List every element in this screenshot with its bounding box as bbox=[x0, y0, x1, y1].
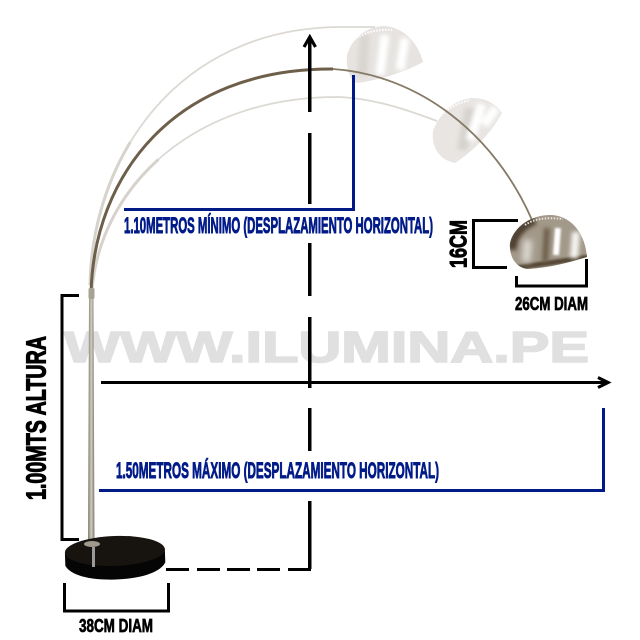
watermark: WWW.ILUMINA.PE bbox=[64, 323, 589, 372]
bracket: height bbox=[62, 296, 79, 540]
bracket: base diameter bbox=[64, 583, 168, 611]
lamp: main arc outer section bbox=[333, 69, 532, 220]
lamp: pole collar bbox=[88, 288, 94, 299]
bracket: shade diameter bbox=[516, 259, 586, 286]
arrow: vertical dashed axis bbox=[304, 37, 316, 569]
arrow: horizontal axis bbox=[101, 378, 608, 388]
icon: upper ghost shade bbox=[346, 26, 423, 83]
lamp: base collar bbox=[84, 541, 100, 547]
lamp: thick ghost sections bbox=[90, 27, 340, 290]
blue bracket: maximum reach bbox=[99, 408, 604, 490]
lamp: pole bbox=[88, 298, 94, 545]
lamp: lower ghost arc bbox=[92, 97, 437, 290]
bracket: shade height bbox=[474, 220, 518, 268]
label: shade diameter: 26CM DIAM bbox=[515, 294, 588, 314]
icon: middle ghost shade bbox=[432, 98, 502, 163]
lamp: upper ghost arc bbox=[90, 27, 375, 285]
lamp: pole reflection bbox=[92, 547, 95, 567]
label: height: 1.00MTS ALTURA bbox=[20, 336, 52, 500]
lamp: marble base bbox=[64, 534, 166, 581]
blue bracket: minimum reach bbox=[124, 75, 354, 210]
label: shade height: 16CM bbox=[446, 220, 472, 268]
icon: main metal shade bbox=[510, 215, 587, 269]
lamp: main arc bbox=[91, 69, 333, 295]
bottom dashed line bbox=[166, 568, 311, 571]
label: base diameter: 38CM DIAM bbox=[79, 616, 153, 636]
